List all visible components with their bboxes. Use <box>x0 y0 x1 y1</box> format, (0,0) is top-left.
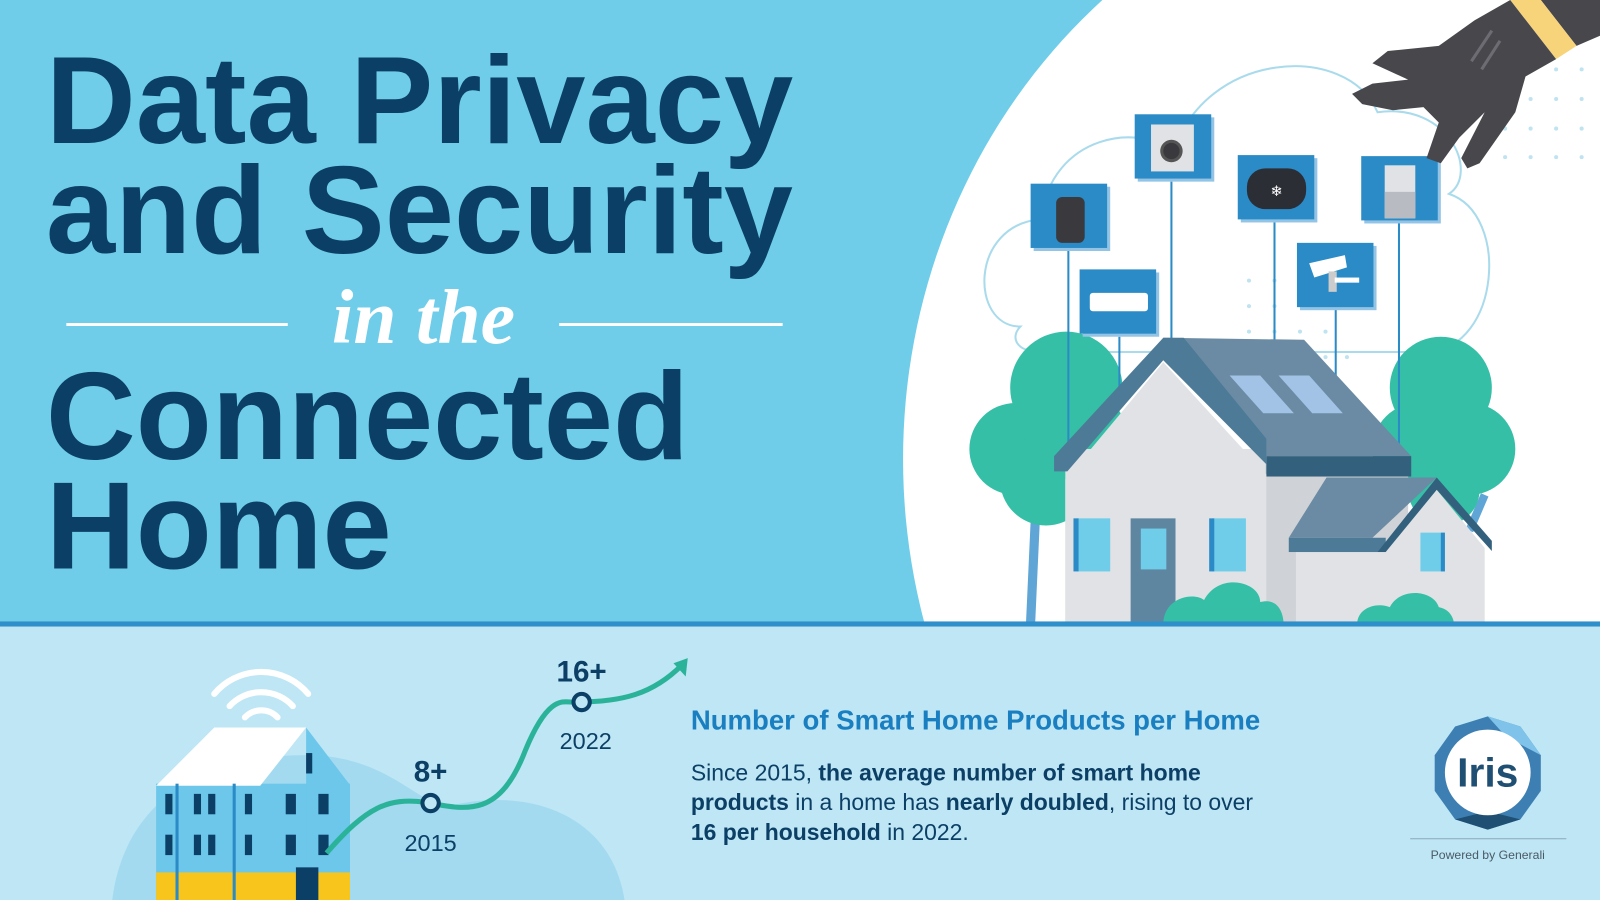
device: fridge <box>1361 156 1441 223</box>
device: thermostat: ❄ <box>1271 184 1283 200</box>
background hills <box>112 755 624 900</box>
growth chart: 16+ <box>557 656 607 689</box>
small house icon <box>156 728 350 900</box>
dot grids <box>1247 67 1584 359</box>
title: Connected <box>46 347 689 486</box>
growth chart: 8+ <box>414 756 447 789</box>
body text: products in a home has nearly doubled, rising to over <box>691 789 1253 815</box>
subtitle: in the: in the <box>332 274 515 360</box>
title: Data Privacy <box>46 31 793 170</box>
white circle backdrop <box>903 0 1600 622</box>
title: Home <box>46 456 392 595</box>
hand <box>1352 0 1600 168</box>
body text: Since 2015, the average number of smart home <box>691 760 1201 786</box>
powered by: Powered by Generali <box>1431 848 1545 862</box>
body text: 16 per household in 2022. <box>691 819 969 845</box>
heading: Number of Smart Home Products per Home <box>691 705 1260 736</box>
wires <box>1068 182 1399 500</box>
Iris logo: Iris <box>1457 750 1518 796</box>
title: and Security <box>46 141 793 280</box>
device: air conditioner <box>1080 269 1159 337</box>
growth chart: 2022 <box>560 728 612 754</box>
device: thermostat <box>1238 155 1317 222</box>
growth chart <box>327 656 688 856</box>
device: security camera <box>1297 243 1377 310</box>
device: smart speaker <box>1031 184 1110 251</box>
wifi icon <box>214 672 308 717</box>
growth chart: 2015 <box>405 830 457 856</box>
title <box>46 31 793 595</box>
divider line <box>0 621 1600 627</box>
cloud outline <box>984 66 1489 352</box>
Iris logo <box>1435 716 1541 830</box>
trees <box>969 332 1515 622</box>
house <box>1054 338 1492 624</box>
body text <box>691 760 1253 845</box>
device: washing machine <box>1135 114 1214 182</box>
